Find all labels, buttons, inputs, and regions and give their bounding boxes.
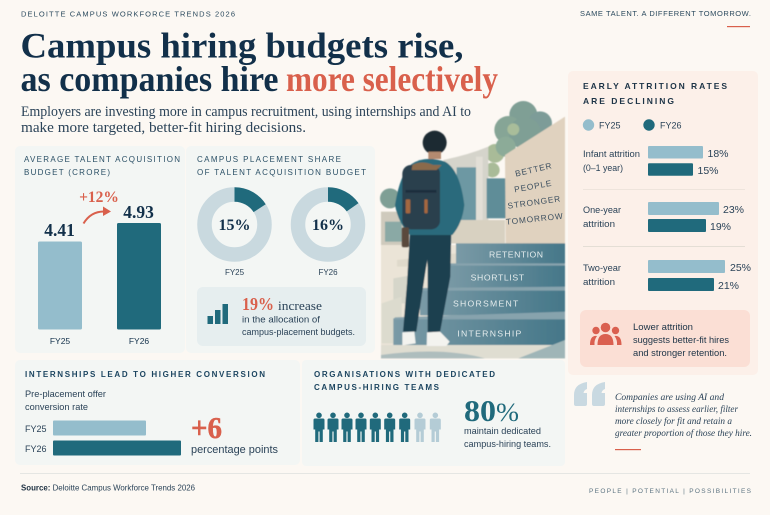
panel heading: AVERAGE TALENT ACQUISITION xyxy=(24,155,180,164)
panel heading xyxy=(314,370,495,392)
donut: FY26 16%: 16% xyxy=(312,217,344,234)
panel heading: CAMPUS-HIRING TEAMS xyxy=(314,383,440,392)
callout: lower attrition: Lower attrition xyxy=(633,322,693,333)
legend: FY25 xyxy=(599,120,621,130)
panel heading: INTERNSHIPS LEAD TO HIGHER CONVERSION xyxy=(25,370,265,379)
steps xyxy=(381,243,565,358)
row: one-year attrition: 19% xyxy=(710,221,731,233)
row: infant attrition xyxy=(583,146,729,177)
ground xyxy=(381,245,565,358)
stat: +6 percentage points: +6 xyxy=(191,410,222,445)
quote text: internships to assess earlier, filter xyxy=(615,404,738,415)
value: 4.93: 4.93 xyxy=(123,202,154,222)
row: two-year attrition: attrition xyxy=(583,277,615,287)
metric label: Pre-placement offer xyxy=(25,389,106,400)
callout: 19% increase: increase xyxy=(278,298,322,313)
right leg xyxy=(425,232,451,332)
student xyxy=(395,131,464,346)
subtitle: make more targeted, better-fit hiring decisions. xyxy=(21,120,306,136)
bar: FY26 xyxy=(117,223,161,330)
title: more selectively xyxy=(286,59,498,99)
stat: 80% xyxy=(464,393,551,450)
arrow: growth xyxy=(84,206,111,224)
donut: FY25 15% xyxy=(204,187,266,277)
icon: quotation mark xyxy=(574,382,605,406)
axis labels: FY26 xyxy=(129,336,149,346)
row: two-year attrition: Two-year xyxy=(583,263,621,273)
panel heading: ARE DECLINING xyxy=(583,96,674,106)
title xyxy=(20,26,498,99)
main building xyxy=(443,147,488,243)
donut: FY26 16%: FY26 xyxy=(318,268,338,277)
wall text: PEOPLE xyxy=(513,178,553,194)
panel heading xyxy=(24,155,180,177)
row: infant attrition: (0–1 year) xyxy=(583,163,623,173)
callout: 19% increase: campus-placement budgets. xyxy=(242,327,355,337)
legend: FY26 xyxy=(660,120,682,130)
row: one-year attrition: 23% xyxy=(723,204,744,216)
backpack xyxy=(402,165,440,229)
bar: FY26 xyxy=(25,440,181,456)
bar: FY25 xyxy=(38,242,82,330)
step labels: RETENTION xyxy=(489,249,543,259)
stat: 80%: 80 xyxy=(464,393,496,428)
quote text: more closely for fit and retain a xyxy=(615,416,732,427)
icon: bar chart xyxy=(208,304,228,324)
callout: 19% increase: 19% xyxy=(242,294,274,314)
growth: +12%: +12% xyxy=(79,189,119,206)
panel: average talent acquisition budget xyxy=(15,146,185,353)
footer tagline: PEOPLE | POTENTIAL | POSSIBILITIES xyxy=(589,488,752,495)
stat: 80%: maintain dedicated xyxy=(464,426,541,437)
callout: lower attrition: suggests better-fit hires xyxy=(633,335,729,346)
axis labels xyxy=(50,336,149,346)
panel heading: CAMPUS PLACEMENT SHARE xyxy=(197,155,341,164)
legend xyxy=(583,119,682,131)
row: two-year attrition: 21% xyxy=(718,280,739,292)
row: one-year attrition xyxy=(583,202,744,233)
panel heading: ORGANISATIONS WITH DEDICATED xyxy=(314,370,495,379)
step labels: SHORTLIST xyxy=(471,273,525,283)
value: 4.41: 4.41 xyxy=(44,220,75,240)
wall text: BETTER xyxy=(514,160,553,179)
left building xyxy=(381,212,404,247)
carved wall xyxy=(505,117,565,244)
row: two-year attrition xyxy=(583,260,751,292)
left leg xyxy=(403,232,432,332)
row: infant attrition: Infant attrition xyxy=(583,149,640,159)
stat: +6 percentage points: percentage points xyxy=(191,444,278,456)
panel heading: EARLY ATTRITION RATES xyxy=(583,81,727,91)
panel heading: BUDGET (CRORE) xyxy=(24,168,110,177)
step labels: INTERNSHIP xyxy=(457,328,522,338)
donut: FY26 16% xyxy=(298,187,358,277)
metric label xyxy=(25,389,106,413)
title: as companies hire xyxy=(20,59,279,99)
panel heading xyxy=(197,155,366,177)
wall text: STRONGER xyxy=(507,193,562,211)
eyebrow: report name: DELOITTE CAMPUS WORKFORCE TRENDS 2026 xyxy=(21,10,235,18)
panel: organisations with dedicated teams xyxy=(302,360,565,466)
illustration: student facing steps xyxy=(380,101,565,358)
row: two-year attrition: 25% xyxy=(730,262,751,274)
donut: FY25 15%: FY25 xyxy=(225,268,245,277)
stat: 80%: % xyxy=(496,398,519,427)
bar: FY25: FY25 xyxy=(25,424,47,434)
wall text: TOMORROW xyxy=(505,211,564,227)
panel: internships lead to higher conversion xyxy=(15,360,300,465)
subtitle: Employers are investing more in campus recruitment, using internships and AI to xyxy=(21,104,471,120)
callout: lower attrition xyxy=(580,310,750,367)
bar: FY26: FY26 xyxy=(25,444,47,454)
wall text xyxy=(505,160,564,227)
title: Campus hiring budgets rise, xyxy=(20,26,464,66)
icon: people group xyxy=(590,323,622,345)
tagline with red rule: SAME TALENT. A DIFFERENT TOMORROW. xyxy=(580,9,751,18)
stat: +6 percentage points xyxy=(191,410,278,456)
source: Source: Deloitte Campus Workforce Trends 2026 xyxy=(21,482,195,492)
row: one-year attrition: attrition xyxy=(583,219,615,229)
callout: lower attrition: and stronger retention. xyxy=(633,348,727,359)
callout: 19% increase xyxy=(197,287,366,346)
row: infant attrition: 18% xyxy=(708,148,729,160)
step labels: SHORSMENT xyxy=(453,299,519,309)
quote text xyxy=(615,392,752,439)
quote text: Companies are using AI and xyxy=(615,392,724,403)
quote text: greater proportion of those they hire. xyxy=(615,428,752,439)
stat: 80%: campus-hiring teams. xyxy=(464,439,551,450)
bar: FY25 xyxy=(25,420,146,436)
subtitle xyxy=(21,104,471,136)
row: one-year attrition: One-year xyxy=(583,205,621,215)
metric label: conversion rate xyxy=(25,402,88,413)
tree behind wall xyxy=(380,101,552,208)
panel heading xyxy=(583,81,727,106)
callout: 19% increase: in the allocation of xyxy=(242,314,321,324)
pictogram: 80% of people xyxy=(314,412,441,442)
row: infant attrition: 15% xyxy=(698,165,719,177)
step labels xyxy=(453,249,543,338)
axis labels: FY25 xyxy=(50,336,70,346)
panel: campus placement share xyxy=(186,146,375,353)
donut: FY25 15%: 15% xyxy=(218,217,250,234)
panel heading: OF TALENT ACQUISITION BUDGET xyxy=(197,168,366,177)
panel: early attrition rates xyxy=(568,71,758,375)
